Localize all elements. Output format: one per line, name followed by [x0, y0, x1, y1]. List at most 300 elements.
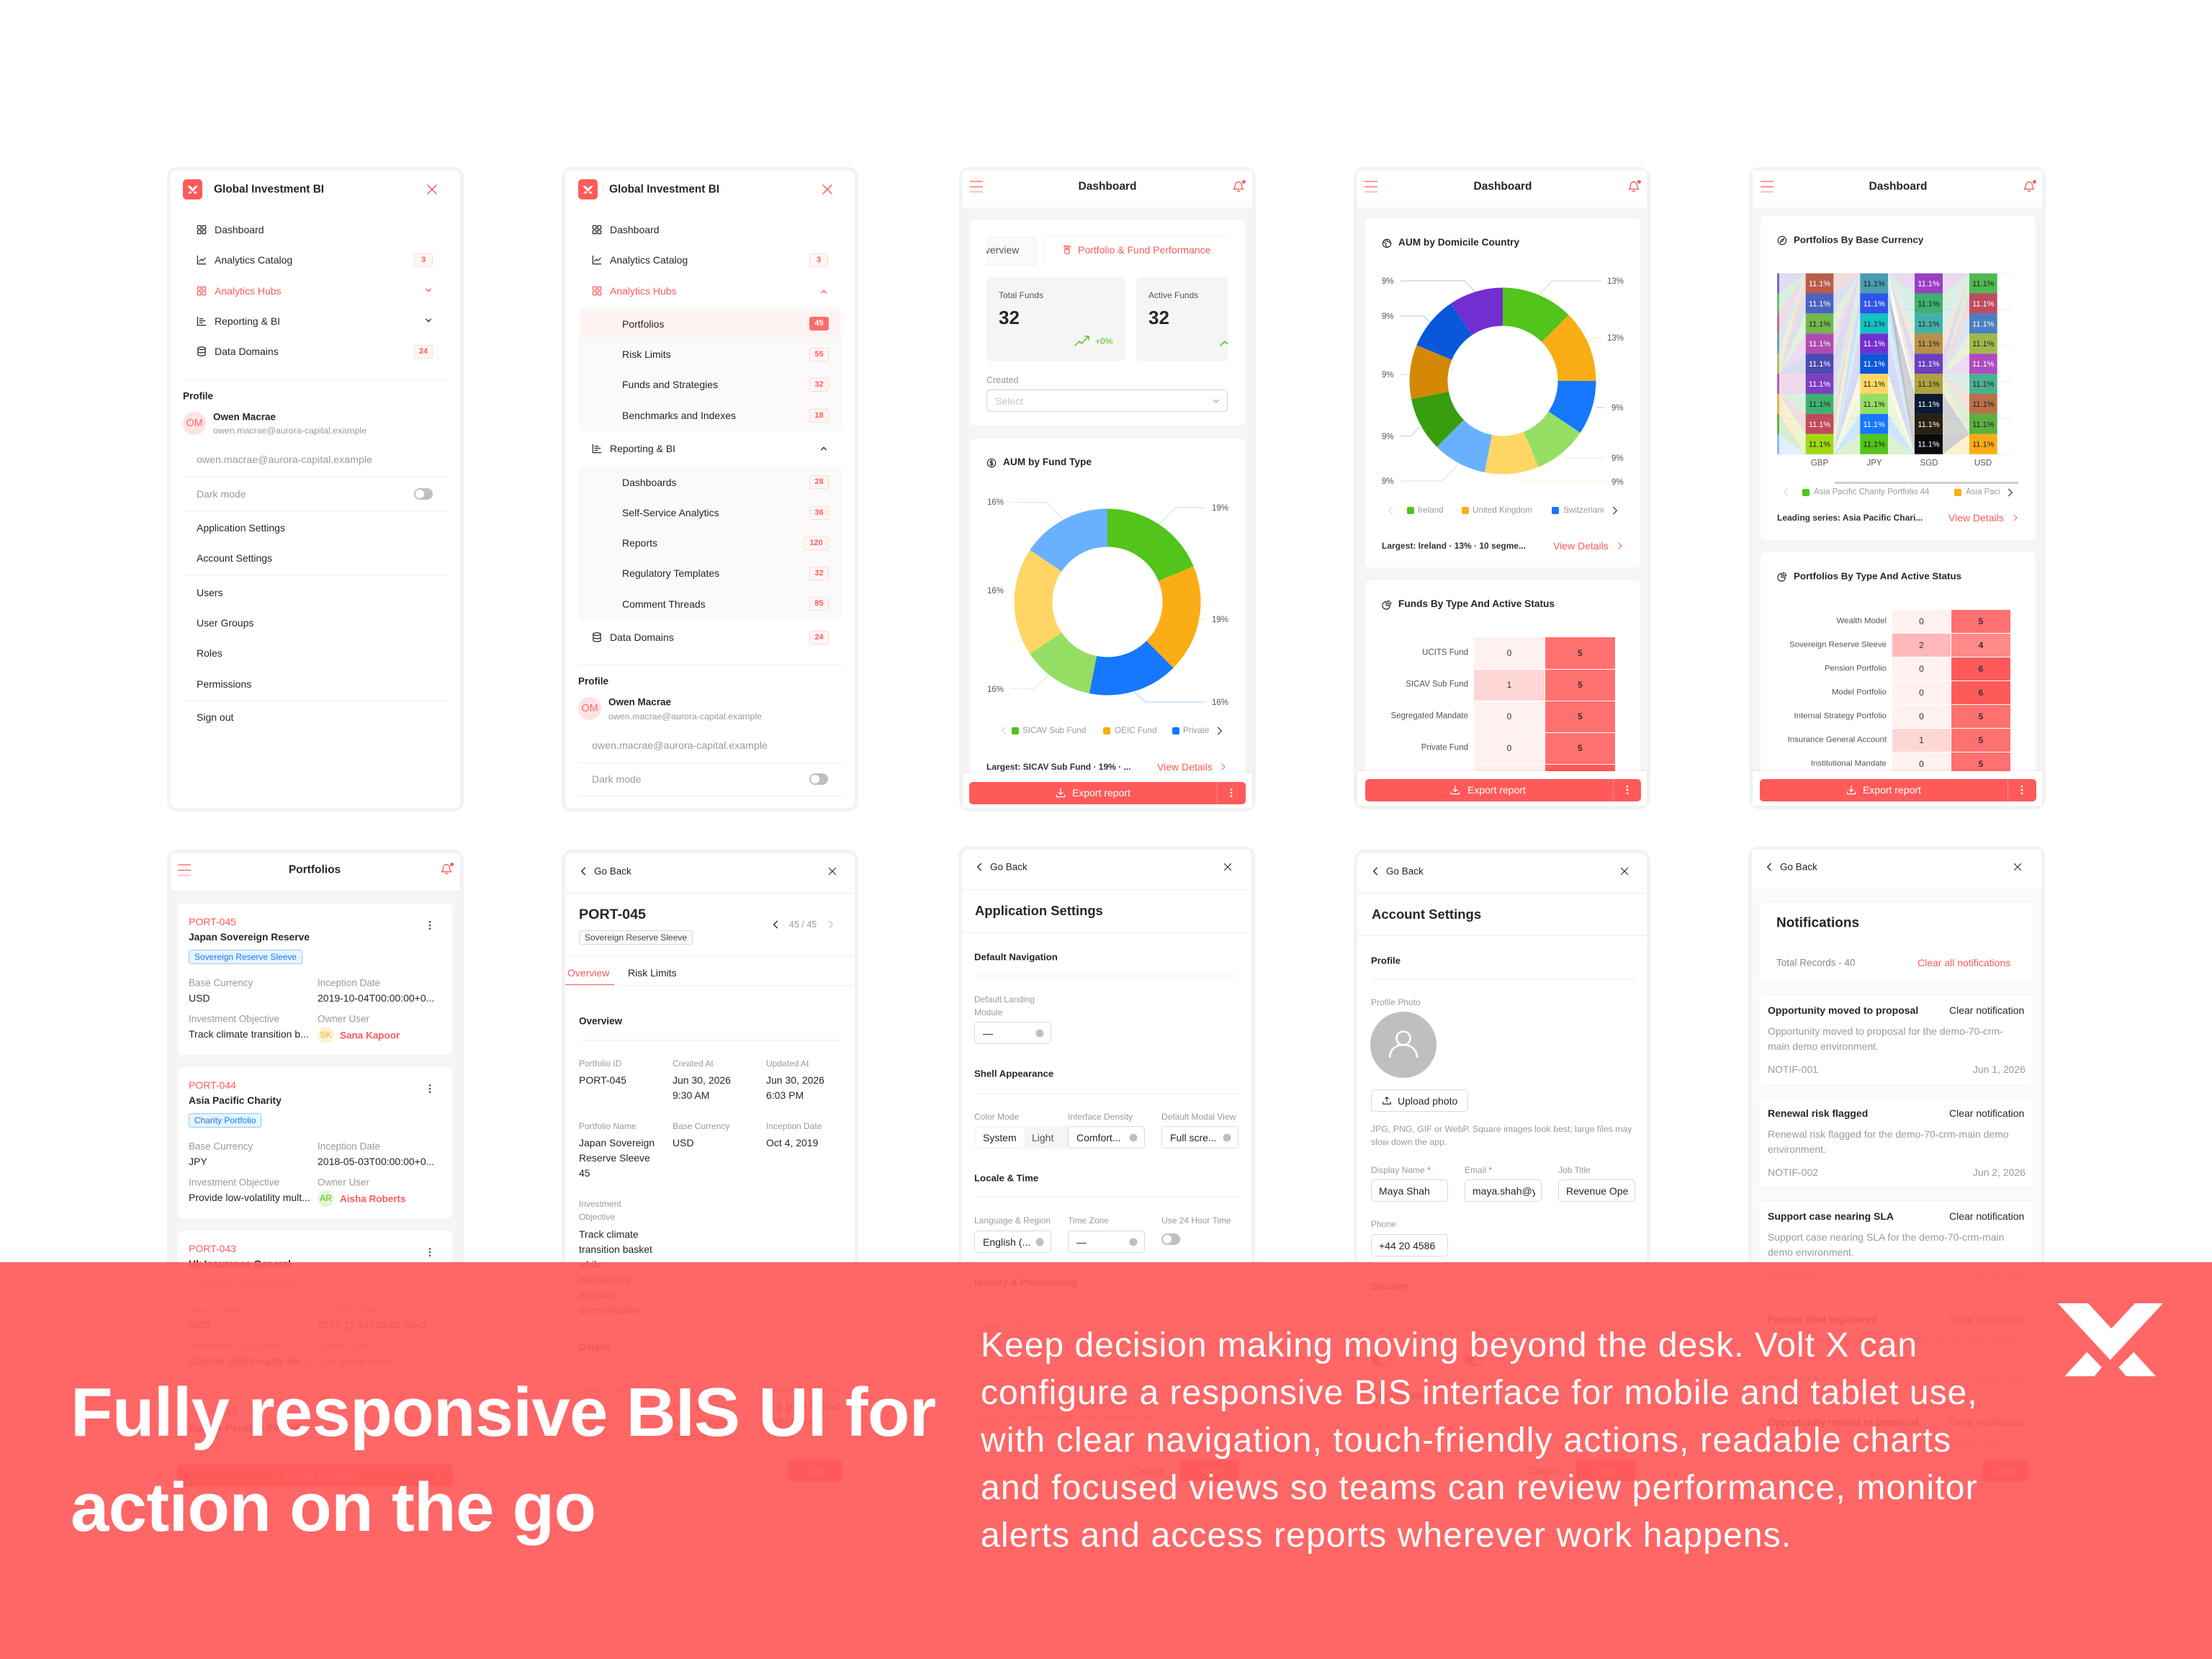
section: identity and provisioning: When enabled, this tenant's users become managed by — [974, 1382, 1196, 1393]
upload button: Upload photo — [1398, 1095, 1457, 1107]
owner details — [579, 1382, 845, 1447]
sankey chart: 11.1% — [1809, 320, 1830, 328]
back navigation: Go Back — [1780, 861, 1817, 872]
owner details: Council — [673, 1431, 706, 1442]
nav item: dashboard: Dashboard — [610, 224, 660, 235]
heatmap title: Portfolios By Type And Active Status — [1794, 570, 1961, 581]
profile block: OM — [186, 418, 203, 429]
footer action bar — [1753, 771, 2042, 806]
submenu: reporting: Reports — [622, 537, 657, 549]
KPI cards: +0% — [1095, 336, 1112, 346]
notification: partner deal — [1759, 1303, 2034, 1394]
owner details: Owner User — [579, 1385, 625, 1395]
section: default navigation: — — [983, 1028, 993, 1039]
legend: Ireland — [1418, 505, 1444, 515]
sankey chart: 11.1% — [1917, 279, 1940, 288]
heatmap: funds: UCITS Fund — [1422, 648, 1468, 657]
app title: Global Investment BI — [214, 183, 324, 195]
back navigation — [1368, 863, 1635, 880]
profile block — [578, 675, 762, 721]
donut chart: domicile: 9% — [1611, 454, 1624, 463]
profile block — [183, 390, 367, 436]
submenu: analytics hubs: Risk Limits — [622, 349, 671, 360]
card: PORT-045: PORT-045 — [189, 916, 236, 927]
profile photo placeholder — [1370, 1012, 1437, 1078]
KPI cards — [986, 277, 1228, 361]
heatmap: funds: 5 — [1578, 743, 1583, 753]
close icon — [427, 184, 437, 194]
details grid: Reserve Sleeve — [579, 1152, 650, 1164]
notification: support case: Clear notification — [1949, 1210, 2024, 1222]
heatmap: portfolios: 0 — [1919, 759, 1924, 769]
back navigation — [1752, 850, 2041, 889]
notification: support case: Jun 3, 2026 — [1973, 1269, 2026, 1281]
notification: partner deal: Partner deal registered for the demo-70-crm-main demo — [1768, 1334, 2018, 1346]
sankey chart: 11.1% — [1917, 421, 1940, 429]
profile form fields: Display Name * — [1371, 1165, 1431, 1175]
export button: Export report — [1072, 787, 1130, 799]
section: default navigation: Default Navigation — [974, 951, 1058, 962]
card: PORT-043: Owner User — [318, 1340, 369, 1351]
section: identity and provisioning: Identity & Provisioning — [974, 1277, 1078, 1287]
KPI cards: Active Funds — [1148, 290, 1198, 300]
settings menu: User Groups — [197, 617, 253, 629]
profile block: owen.macrae@aurora-capital.example — [608, 711, 762, 721]
card: PORT-045: Sana Kapoor — [340, 1030, 400, 1040]
submenu: reporting — [578, 466, 842, 621]
profile form fields: Email * — [1465, 1165, 1492, 1175]
details grid: 6:03 PM — [766, 1089, 804, 1101]
back navigation — [581, 866, 836, 876]
heatmap: portfolios: 2 — [1919, 640, 1924, 650]
owner details: Kapoor — [579, 1416, 611, 1427]
notification: partner deal: Clear notification — [1949, 1313, 2024, 1325]
sankey chart: 11.1% — [1809, 300, 1830, 308]
card: PORT-042 — [178, 1395, 452, 1460]
section: default navigation: Module — [974, 1007, 1002, 1017]
nav item: analytics catalog: 3 — [817, 256, 821, 264]
donut chart: fund type: 19% — [1212, 616, 1228, 624]
notification: opportunity: NOTIF-001 — [1768, 1064, 1818, 1075]
donut chart: fund type: 16% — [1212, 698, 1228, 707]
card: funds heatmap — [1365, 580, 1640, 775]
heatmap: portfolios: Pension Portfolio — [1825, 664, 1887, 673]
card: PORT-043: Inception Date — [318, 1304, 380, 1315]
chart title: Portfolios By Base Currency — [1794, 234, 1923, 245]
heatmap: funds — [1391, 637, 1615, 771]
card: PORT-044: Provide low-volatility mult... — [189, 1192, 310, 1203]
section: shell appearance: Color Mode — [974, 1112, 1019, 1122]
title: action on the go — [71, 1469, 595, 1546]
nav item: analytics catalog — [197, 253, 433, 267]
donut chart: fund type: 16% — [987, 685, 1004, 694]
card: AUM by fund type — [970, 439, 1245, 777]
owner details: ICE BofA Global — [766, 1401, 839, 1412]
sankey chart: 11.1% — [1972, 279, 1995, 288]
nav item: reporting: Reporting & BI — [215, 315, 280, 327]
card: PORT-045: USD — [189, 992, 210, 1004]
card: PORT-043: Insurance General Account — [194, 1279, 299, 1289]
chart summary: View Details — [1948, 512, 2004, 523]
details grid: Inception Date — [766, 1121, 822, 1131]
owner details: Governance — [673, 1416, 727, 1427]
notification: opportunity: Clear notification — [1949, 1004, 2024, 1016]
legend: United Kingdom — [1473, 505, 1532, 515]
card: PORT-043: Base Currency — [189, 1304, 253, 1315]
phone: account settings — [1354, 850, 1650, 1494]
card: PORT-044: Owner User — [318, 1177, 369, 1187]
footer buttons: Save — [1594, 1465, 1617, 1476]
upload hint: slow down the app. — [1371, 1137, 1447, 1147]
heatmap: portfolios: 5 — [1979, 759, 1983, 769]
nav item: data domains: 24 — [419, 347, 428, 356]
icon: Volt X logo — [2057, 1303, 2163, 1377]
profile block: Owen Macrae — [608, 696, 671, 707]
section: shell appearance: Shell Appearance — [974, 1068, 1053, 1079]
heatmap: portfolios — [1788, 610, 2010, 771]
owner details: Owner Group — [673, 1385, 724, 1395]
section heading: overview: Overview — [579, 1015, 622, 1026]
section heading: details: Details — [579, 1341, 611, 1352]
settings menu: Roles — [197, 647, 222, 659]
card: PORT-045: Base Currency — [189, 977, 253, 988]
export button — [1365, 779, 1641, 801]
settings menu — [197, 522, 285, 723]
section: security: Mentioned — [1465, 1336, 1505, 1346]
nav item: reporting: Reporting & BI — [610, 443, 675, 454]
details grid: Track climate — [579, 1228, 639, 1240]
create portfolio button — [177, 1465, 453, 1487]
section: identity and provisioning: your identity provider. Only this tenant's roles, user — [974, 1398, 1176, 1408]
tabs: Overview — [567, 967, 609, 979]
chart summary: View Details — [1157, 761, 1213, 773]
section: security: Authentication — [1371, 1336, 1426, 1346]
legend: OEIC Fund — [1115, 726, 1156, 735]
donut chart: fund type — [987, 498, 1228, 707]
notifications header card: Total Records - 40 — [1776, 957, 1856, 968]
phone: portfolios list — [167, 850, 464, 1494]
card: PORT-043: Maya Patel — [340, 1357, 390, 1367]
settings menu: Account Settings — [197, 552, 272, 564]
back navigation: Go Back — [1386, 866, 1424, 876]
sankey chart: 11.1% — [1972, 300, 1995, 308]
section: locale and time: Time Zone — [1068, 1215, 1109, 1226]
sankey chart: 11.1% — [1863, 279, 1885, 288]
done button: Done — [1993, 1465, 2018, 1477]
heatmap: portfolios: 5 — [1979, 616, 1983, 626]
heatmap: portfolios: 5 — [1979, 711, 1983, 721]
profile block: Profile — [578, 675, 608, 686]
section: shell appearance: Comfort... — [1076, 1132, 1120, 1143]
section: organization: Organization — [1371, 1390, 1429, 1401]
export button: Export report — [1863, 784, 1921, 796]
card: PORT-043: AUD — [189, 1319, 210, 1331]
upload hint — [1371, 1123, 1635, 1148]
footer action bar — [171, 1456, 460, 1491]
notifications header card: Clear all notifications — [1917, 957, 2010, 968]
axis labels: GBP — [1811, 459, 1828, 467]
sankey chart: 11.1% — [1809, 340, 1830, 349]
export button: Export report — [1467, 784, 1526, 796]
header bar: Dashboard — [1079, 180, 1136, 192]
KPI cards: 32 — [1148, 307, 1169, 328]
details grid — [579, 1055, 845, 1321]
card: PORT-043: 2017-12-24T00:00:00+0... — [318, 1319, 434, 1331]
section: shell appearance — [974, 1066, 1239, 1149]
heatmap: funds: SICAV Sub Fund — [1406, 680, 1468, 688]
heatmap: portfolios: 0 — [1919, 616, 1924, 626]
header bar: Dashboard — [1869, 180, 1927, 192]
KPI cards: Total Funds — [999, 290, 1043, 300]
nav item: analytics hubs: Analytics Hubs — [215, 285, 282, 297]
owner details: Primary Benchmark — [766, 1385, 842, 1395]
phone: navigation collapsed: owen.macrae@aurora-capital.example — [197, 454, 372, 466]
sankey chart: 11.1% — [1917, 300, 1940, 308]
details grid: Oct 4, 2019 — [766, 1137, 818, 1148]
legend — [1784, 487, 2013, 497]
chart summary: View Details — [1553, 540, 1609, 552]
dark mode toggle: Dark mode — [592, 773, 641, 785]
card: PORT-044: Aisha Roberts — [340, 1193, 406, 1204]
heatmap: funds: 0 — [1507, 648, 1511, 658]
phone: navigation expanded — [562, 167, 858, 811]
heatmap: portfolios: Model Portfolio — [1832, 688, 1887, 696]
description: with clear navigation, touch-friendly actions, readable charts — [981, 1421, 1951, 1460]
axis labels: SGD — [1920, 459, 1938, 467]
section: identity and provisioning: groups, and permissions remain editable here. — [974, 1413, 1159, 1423]
heatmap: portfolios: 0 — [1919, 688, 1924, 698]
notification: partner deal: environment. — [1768, 1349, 1826, 1361]
tabs — [986, 236, 1228, 266]
sankey chart: 11.1% — [1809, 360, 1830, 369]
banner background — [0, 1262, 2212, 1659]
phone: account settings: Profile Photo — [1371, 997, 1421, 1007]
header bar — [1753, 171, 2042, 207]
submenu: reporting: 28 — [814, 477, 824, 486]
title — [71, 1365, 956, 1555]
sankey chart: 11.1% — [1863, 400, 1885, 409]
heatmap: funds: 5 — [1578, 680, 1583, 690]
created filter — [986, 375, 1228, 412]
heatmap: portfolios: 4 — [1979, 640, 1983, 650]
card: PORT-045: Sovereign Reserve Sleeve — [194, 952, 297, 962]
nav item: reporting — [197, 315, 431, 327]
section: identity and provisioning — [974, 1275, 1239, 1426]
notification: opportunity repeated: Clear notification — [1949, 1416, 2024, 1428]
heatmap: funds: Segregated Mandate — [1391, 711, 1468, 720]
section: locale and time: Use 24 Hour Time — [1161, 1215, 1231, 1226]
donut chart: domicile: 9% — [1382, 433, 1394, 441]
sankey chart: 11.1% — [1809, 400, 1830, 409]
heatmap: funds: 0 — [1507, 711, 1511, 721]
description: configure a responsive BIS interface for mobile and tablet use, — [981, 1374, 1978, 1412]
details grid: USD — [673, 1137, 694, 1148]
footer buttons: Cancel — [1528, 1465, 1560, 1476]
footer action bar — [1357, 771, 1647, 806]
notification: opportunity: Opportunity moved to proposal — [1768, 1004, 1918, 1016]
submenu: analytics hubs: Benchmarks and Indexes — [622, 410, 736, 421]
donut chart: domicile: 9% — [1382, 477, 1394, 486]
tabs: Risk Limits — [628, 967, 677, 979]
submenu: analytics hubs: 18 — [814, 411, 824, 420]
created filter: Created — [986, 375, 1018, 385]
settings menu: Application Settings — [197, 522, 285, 534]
section: security: Security — [1371, 1280, 1408, 1291]
card: PORT-043: MP — [324, 1357, 337, 1367]
notification: opportunity: Opportunity moved to proposal for the demo-70-crm- — [1768, 1025, 2003, 1037]
details grid: Updated At — [766, 1058, 809, 1069]
sankey chart: 11.1% — [1917, 441, 1940, 449]
phone: notifications — [1748, 846, 2045, 1491]
section: shell appearance: Light — [1032, 1132, 1053, 1143]
details grid: Base Currency — [673, 1121, 729, 1131]
details grid: Objective — [579, 1212, 615, 1222]
heatmap: portfolios: Insurance General Account — [1788, 735, 1887, 744]
details grid: Japan Sovereign — [579, 1137, 655, 1148]
notification: renewal: Clear notification — [1949, 1107, 2024, 1119]
notification: renewal: environment. — [1768, 1143, 1826, 1155]
header bar: Dashboard — [1474, 180, 1532, 192]
heatmap: portfolios: 1 — [1919, 735, 1924, 745]
details grid: Investment — [579, 1199, 621, 1209]
section: locale and time: Language & Region — [974, 1215, 1051, 1226]
sankey chart: 11.1% — [1972, 360, 1995, 369]
heatmap: portfolios: Wealth Model — [1837, 616, 1887, 625]
footer buttons: Cancel — [1132, 1465, 1164, 1477]
nav item: analytics hubs: Analytics Hubs — [610, 285, 677, 297]
upload button — [1371, 1089, 1468, 1112]
sankey chart: 11.1% — [1972, 320, 1995, 328]
sankey chart: 11.1% — [1863, 360, 1885, 369]
sankey chart: 11.1% — [1917, 320, 1940, 328]
section: shell appearance: Interface Density — [1068, 1112, 1133, 1122]
nav item: analytics hubs — [197, 285, 431, 297]
footer buttons: Save — [1198, 1465, 1221, 1477]
card: PORT-045: Japan Sovereign Reserve — [189, 932, 310, 943]
card: PORT-042: PORT-042 — [189, 1407, 236, 1419]
axis labels — [1811, 459, 1992, 467]
header bar — [171, 853, 460, 891]
chart summary: Leading series: Asia Pacific Chari... — [1777, 513, 1923, 523]
nav item: data domains: Data Domains — [610, 631, 674, 643]
record tag: Sovereign Reserve Sleeve — [585, 932, 687, 943]
details grid: regional — [579, 1289, 615, 1300]
sankey chart: 11.1% — [1972, 340, 1995, 349]
notification: renewal: Renewal risk flagged — [1768, 1107, 1868, 1119]
owner details: Light Blend — [766, 1416, 817, 1427]
submenu: reporting: 36 — [814, 508, 824, 517]
card: PORT-045: Owner User — [318, 1013, 369, 1024]
card: PORT-044: Inception Date — [318, 1141, 380, 1151]
heatmap: funds: 5 — [1578, 648, 1583, 658]
profile block: Profile — [183, 390, 213, 401]
footer buttons — [1518, 1460, 1635, 1481]
notification: renewal — [1759, 1097, 2034, 1188]
legend: Asia Pacific Charity Portfolio 44 — [1814, 487, 1929, 496]
sankey chart — [1777, 274, 2011, 455]
card: PORT-044: PORT-044 — [189, 1079, 236, 1091]
heatmap: funds: Private Fund — [1421, 743, 1468, 752]
nav item: data domains — [197, 345, 433, 359]
description: and focused views so teams can review performance, monitor — [981, 1469, 1978, 1507]
chart summary — [1382, 540, 1622, 552]
page title: Application Settings — [975, 903, 1103, 918]
sankey chart: 11.1% — [1972, 380, 1995, 389]
description: Keep decision making moving beyond the desk. Volt X can — [981, 1326, 1917, 1364]
dark mode toggle — [592, 773, 828, 785]
section: identity and provisioning: Provisioning — [974, 1333, 1021, 1343]
phone: dashboard with domicile donut and heatmap — [1354, 167, 1650, 809]
submenu: reporting: Self-Service Analytics — [622, 507, 719, 518]
card: PORT-043: Uk Insurance General — [189, 1259, 291, 1269]
card: PORT-044: AR — [320, 1193, 332, 1203]
card: PORT-045: Investment Objective — [189, 1013, 279, 1024]
sankey chart: 11.1% — [1917, 340, 1940, 349]
sankey chart: 11.1% — [1863, 380, 1885, 389]
KPI cards: 32 — [999, 307, 1020, 328]
submenu: reporting: Comment Threads — [622, 598, 706, 610]
created filter: Select — [995, 395, 1023, 407]
section: default navigation — [974, 950, 1239, 1045]
nav item: data domains — [593, 631, 829, 644]
axis labels: JPY — [1866, 459, 1882, 467]
chart summary: Largest: Ireland · 13% · 10 segme... — [1382, 541, 1526, 551]
sankey chart: 11.1% — [1863, 340, 1885, 349]
section: organization: Total Roles — [1465, 1433, 1507, 1443]
pager: 45 / 45 — [789, 920, 817, 930]
pager — [773, 920, 833, 930]
submenu: analytics hubs: 32 — [814, 380, 824, 389]
heatmap: portfolios: 6 — [1979, 664, 1983, 674]
card: PORT-044 — [178, 1067, 452, 1218]
sankey chart: 11.1% — [1809, 441, 1830, 449]
description — [981, 1322, 2003, 1560]
card: PORT-044: Base Currency — [189, 1141, 253, 1151]
chart summary: Largest: SICAV Sub Fund · 19% · ... — [986, 762, 1130, 772]
section: locale and time — [974, 1171, 1239, 1254]
card: AUM by domicile — [1365, 218, 1640, 567]
section: security: Two Factor — [1371, 1323, 1413, 1334]
details grid: Jun 30, 2026 — [673, 1074, 731, 1086]
footer action bar — [963, 773, 1252, 808]
done button — [1983, 1460, 2028, 1482]
nav item: analytics catalog: Analytics Catalog — [215, 254, 292, 266]
back navigation — [973, 858, 1239, 876]
section: locale and time: English (... — [983, 1236, 1030, 1248]
notification: support case: demo environment. — [1768, 1246, 1854, 1258]
app logo — [578, 179, 598, 199]
owner details: Sana — [579, 1401, 603, 1412]
nav item: analytics hubs — [592, 285, 827, 297]
upload hint: JPG, PNG, GIF or WebP. Square images look best; large files may — [1371, 1124, 1632, 1134]
card: PORT-042: Pension Portfolio — [194, 1443, 260, 1453]
phone: navigation expanded: owen.macrae@aurora-capital.example — [592, 740, 768, 752]
sankey chart: 11.1% — [1809, 421, 1830, 429]
tabs: Portfolio & Fund Performance — [1078, 244, 1210, 256]
card: PORT-044: Asia Pacific Charity — [189, 1095, 282, 1106]
chart title: AUM by Fund Type — [1003, 457, 1092, 467]
section: security — [1371, 1278, 1635, 1379]
back navigation: Go Back — [594, 866, 631, 876]
description: alerts and access reports wherever work happens. — [981, 1516, 1791, 1555]
nav item: analytics catalog: Analytics Catalog — [610, 254, 688, 266]
card: PORT-043 — [178, 1231, 452, 1382]
heatmap: funds: 1 — [1507, 680, 1511, 690]
edit button — [788, 1460, 842, 1482]
notification: support case — [1759, 1200, 2034, 1291]
details grid: PORT-045 — [579, 1074, 626, 1086]
notification: support case: NOTIF-003 — [1768, 1269, 1818, 1281]
